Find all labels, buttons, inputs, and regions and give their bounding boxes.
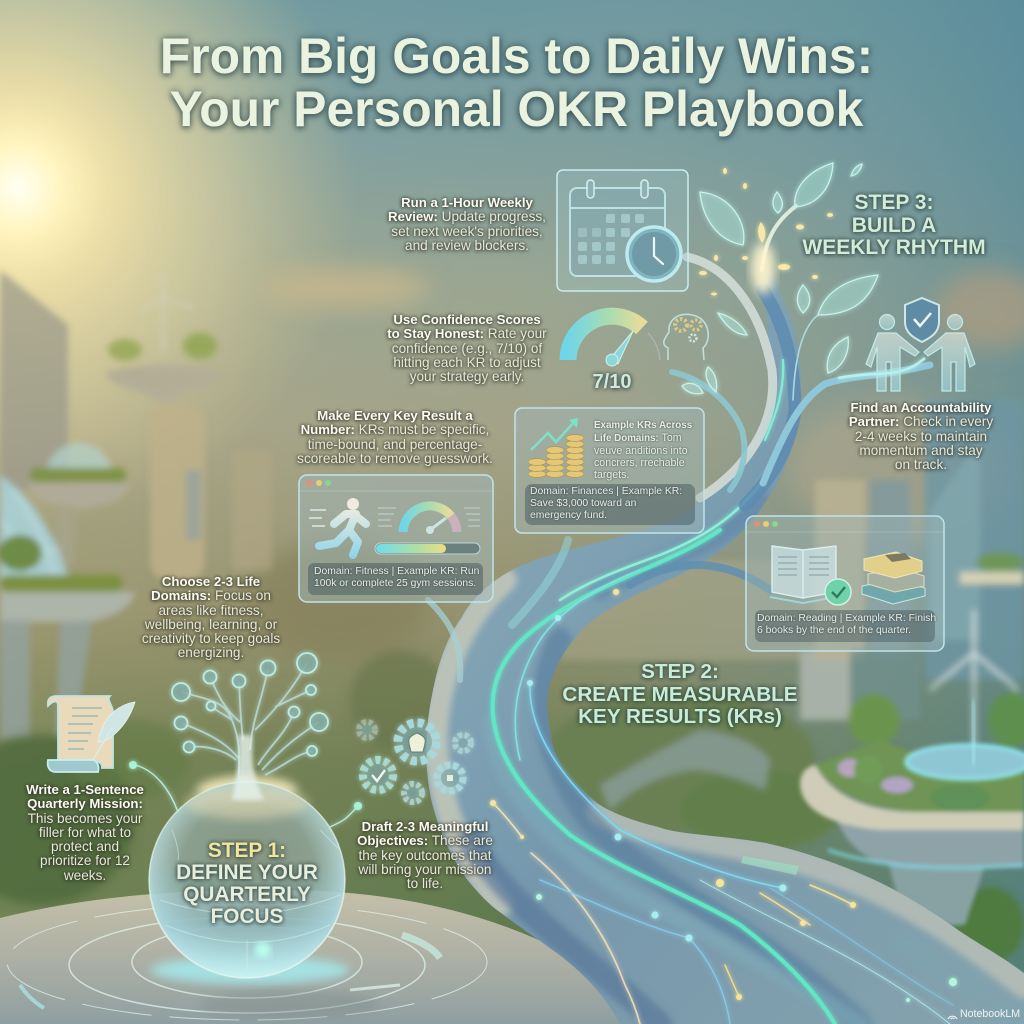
caption: fitness example [314, 566, 480, 589]
icon: scroll and quill [48, 696, 135, 772]
text: accountability partner: 2-4 weeks to maintain [855, 428, 987, 444]
text: make every key result a number: time-bound, and percentage- [308, 436, 482, 452]
icon: notebook mark [948, 1016, 957, 1019]
text: make every key result a number: scoreable to remove guesswork. [297, 451, 493, 466]
text: finances card heading: Life Domains: Tom [594, 432, 682, 444]
text: weekly review [386, 195, 547, 254]
icon: open book [770, 546, 851, 605]
thin upper stem [762, 206, 796, 270]
text: life domains [140, 574, 282, 663]
heading: step 2: KEY RESULTS (KRs) [578, 705, 782, 728]
caption: finances example [530, 486, 682, 521]
heading: step 1: QUARTERLY [183, 883, 311, 906]
text: accountability partner: Find an Accountability [851, 400, 991, 415]
icon: runner [309, 498, 366, 555]
caption: finances example: emergency fund. [530, 510, 607, 521]
heading: step 2: STEP 2: [641, 660, 719, 683]
caption: finances example: Save $3,000 toward an [530, 498, 636, 509]
text: quarterly mission [24, 782, 146, 883]
left person [866, 314, 919, 391]
heading: step 1 [174, 839, 320, 928]
icon: progress gauge [378, 506, 480, 534]
text: life domains: areas like fitness, [158, 602, 264, 618]
confidence branch [672, 372, 744, 490]
text: weekly review: and review blockers. [405, 238, 529, 253]
text: confidence scores: Use Confidence Scores [393, 312, 541, 327]
heading: step 2: CREATE MEASURABLE [562, 682, 798, 706]
partner branch [763, 365, 930, 483]
text: life domains: Choose 2-3 Life [162, 574, 260, 589]
reading branch [630, 565, 770, 590]
tree branches and leaves [428, 163, 930, 680]
icon: book stack [862, 552, 925, 604]
fitness tail [428, 600, 460, 680]
panel: reading card [746, 516, 944, 651]
heading: step 2 [560, 660, 800, 730]
icon: accountability partners with shield [838, 298, 975, 391]
icon: calendar and clock card [557, 170, 688, 291]
caption: reading example [756, 612, 937, 636]
text: finances card heading: veuve anditions into [594, 445, 688, 457]
blue stem [745, 290, 795, 505]
text: draft objectives: Objectives: These are [357, 833, 493, 848]
ribbon light streams [493, 470, 953, 1024]
text: accountability partner: on track. [895, 457, 947, 472]
icon: head with gears [664, 314, 708, 360]
icon: clock [627, 227, 681, 281]
text: quarterly mission: prioritize for 12 [40, 853, 130, 868]
clouds [250, 268, 1024, 660]
watermark: NotebookLM [960, 1008, 1020, 1020]
icon: shield [905, 298, 939, 342]
heading: step 1: STEP 1: [208, 839, 286, 862]
text: draft objectives: will bring your mission [359, 862, 491, 877]
text: confidence scores: hitting each KR to adjust [393, 355, 541, 370]
text: accountability partner: momentum and stay [859, 443, 983, 458]
icon: growth arrow and coins [528, 418, 584, 478]
heading: step 3: WEEKLY RHYTHM [802, 236, 986, 259]
text: finances card heading [593, 420, 693, 482]
caption: fitness example: 100k or complete 25 gym sessions. [314, 578, 476, 589]
text: accountability partner: Partner: Check in every [849, 414, 993, 429]
fountain garden platform, bottom right [800, 700, 1024, 925]
panel: finances card [515, 408, 704, 533]
text: make every key result a number [295, 408, 494, 469]
text: quarterly mission: Quarterly Mission: [27, 796, 143, 811]
heading: step 3: BUILD A [852, 214, 936, 236]
text: draft objectives: Draft 2-3 Meaningful [362, 819, 488, 834]
caption: reading example: 6 books by the end of the quarter. [757, 625, 911, 636]
sun flare [0, 90, 110, 290]
connectors from sphere to notes [135, 765, 358, 827]
text: weekly review: Run a 1-Hour Weekly [401, 195, 533, 210]
heading: step 3 [800, 191, 988, 259]
text: finances card heading: Example KRs Across [594, 420, 692, 431]
text: quarterly mission: protect and [51, 839, 119, 854]
icon: confidence gauge with head and gears [568, 314, 708, 366]
text: accountability partner [846, 400, 996, 472]
sphere [149, 776, 345, 978]
text: life domains: wellbeing, learning, or [145, 617, 277, 632]
caption: fitness example: Domain: Fitness | Example KR: Run [314, 566, 479, 577]
text: quarterly mission: This becomes your [28, 810, 142, 826]
heading: step 3: STEP 3: [854, 191, 933, 214]
text: life domains: energizing. [178, 645, 244, 660]
icon: objective gears [359, 722, 471, 802]
text: draft objectives [355, 819, 495, 891]
table disc with radial HUD rings [0, 890, 640, 1024]
text: quarterly mission: filler for what to [39, 825, 131, 840]
icon: tree of life domains [172, 653, 328, 800]
text: quarterly mission: Write a 1-Sentence [26, 782, 144, 797]
heading: step 1: FOCUS [211, 905, 283, 928]
text: make every key result a number: Make Every Key Result a [317, 408, 473, 423]
ribbon shading bands [436, 500, 1024, 1024]
text: confidence scores: your strategy early. [410, 369, 524, 384]
text: life domains: creativity to keep goals [142, 631, 280, 646]
progress bar [375, 543, 480, 554]
text: make every key result a number: Number: KRs must be specific, [301, 422, 489, 437]
text: weekly review: Review: Update progress, [388, 209, 546, 224]
text: life domains: Domains: Focus on [151, 588, 271, 603]
text: weekly review: set next week's priorities, [391, 224, 543, 238]
title: From Big Goals to Daily Wins: [160, 28, 873, 84]
caption: reading example: Domain: Reading | Example KR: Finish [757, 613, 936, 624]
panel: fitness card [299, 475, 493, 602]
title: Your Personal OKR Playbook [170, 81, 863, 137]
text: finances card heading: concrers, rrechable [594, 457, 685, 469]
finances tail [512, 540, 568, 625]
pale left limb [687, 257, 773, 498]
text: confidence scores: to Stay Honest: Rate your [387, 326, 547, 341]
left city: building, floating platform, domes [0, 270, 272, 740]
text: quarterly mission: weeks. [64, 868, 106, 882]
flowing ribbon trunk [426, 262, 1024, 1024]
title [46, 28, 873, 876]
text: draft objectives: to life. [407, 876, 443, 891]
right city: towers, greenery, road [545, 400, 1024, 963]
text: confidence scores: confidence (e.g., 7/10) of [392, 340, 542, 356]
text: draft objectives: the key outcomes that [358, 848, 492, 862]
caption: finances example: Domain: Finances | Example KR: [530, 486, 682, 497]
text: finances card heading: targets. [594, 469, 629, 481]
right person [924, 314, 975, 391]
gauge score: 7/10 [593, 371, 631, 393]
heading: step 1: DEFINE YOUR [176, 861, 318, 884]
text: confidence scores [384, 312, 548, 388]
